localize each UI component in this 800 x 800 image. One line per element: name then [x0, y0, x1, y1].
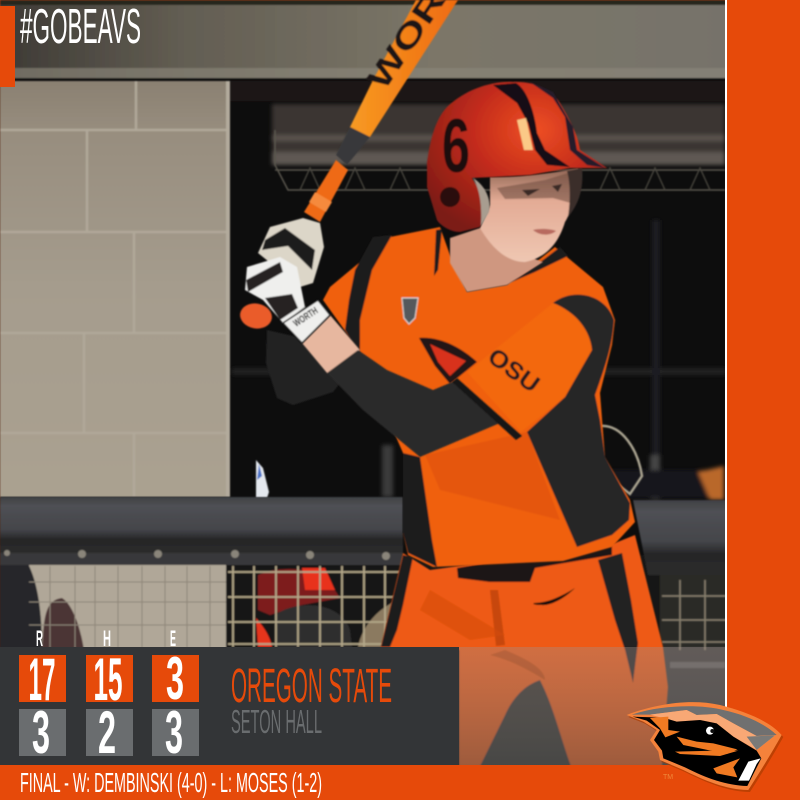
inning stat labels: R — [36, 626, 43, 651]
inning stat labels — [36, 626, 176, 651]
hashtag corner tab — [0, 6, 15, 87]
icon: Oregon State beaver logo — [627, 702, 783, 792]
arm and sleeve — [302, 315, 522, 457]
Oregon State line score — [19, 645, 199, 713]
right orange sidebar — [725, 0, 800, 800]
neck and face — [450, 168, 582, 292]
inning stat labels: H — [103, 626, 111, 651]
bat — [238, 0, 458, 331]
bottom result bar — [0, 765, 727, 800]
conference patch — [402, 298, 418, 324]
Seton Hall line score — [19, 699, 199, 766]
team beaver crest on jersey — [419, 338, 477, 384]
helmet number: 6 — [442, 104, 470, 189]
Oregon State line score: 17 — [28, 646, 56, 713]
padded rail and net — [0, 497, 726, 767]
black side panel — [527, 295, 630, 547]
Seton Hall line score: 2 — [98, 699, 116, 766]
scoreboard panel: SETON HALL — [231, 703, 322, 740]
batting gloves — [245, 218, 330, 343]
back arm sleeve — [266, 330, 358, 405]
Oregon State line score: 3 — [166, 645, 184, 712]
pants — [380, 535, 668, 766]
scoreboard panel — [0, 645, 725, 766]
sleeve letters: OSU — [482, 343, 544, 398]
Seton Hall line score: 3 — [32, 699, 50, 766]
batting helmet — [427, 82, 607, 232]
final result line: FINAL - W: DEMBINSKI (4-0) - L: MOSES (1-2) — [20, 767, 322, 798]
concrete block wall — [0, 81, 230, 497]
text: #GOBEAVS — [20, 0, 141, 54]
Oregon State line score: 15 — [94, 646, 122, 713]
Seton Hall line score: 3 — [165, 699, 183, 766]
text: E — [170, 626, 176, 651]
wrist strap brand: WORTH — [292, 306, 320, 330]
scoreboard panel: OREGON STATE — [231, 660, 392, 713]
trademark mark: TM — [663, 774, 673, 781]
jersey — [323, 227, 635, 567]
bat brand: WOR — [360, 0, 452, 96]
